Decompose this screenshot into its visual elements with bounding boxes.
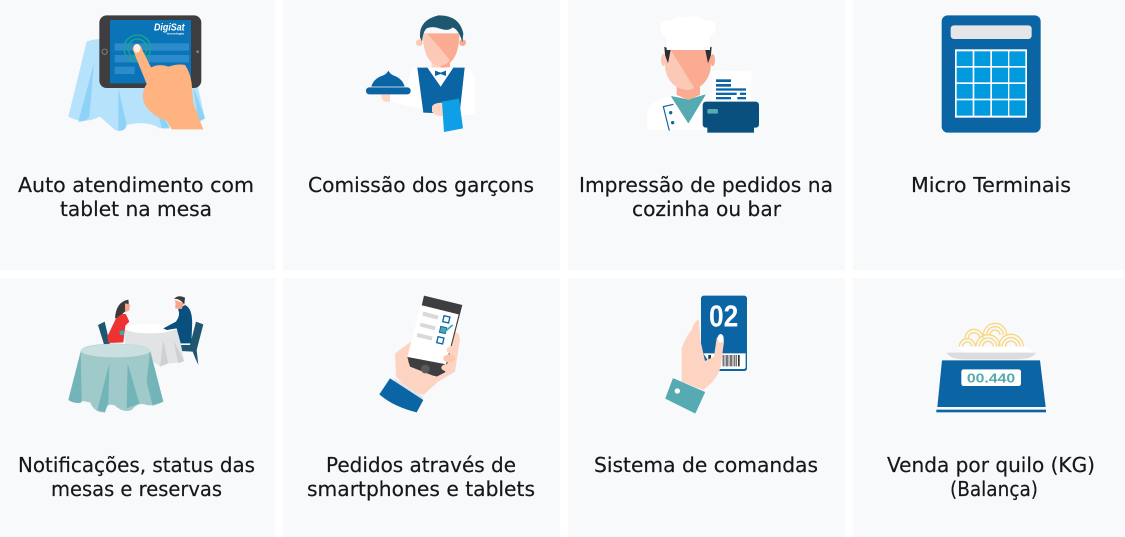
icon: tablet on table with hand: tecnologia (167, 32, 184, 36)
label: venda por quilo: Venda por quilo (KG) (887, 453, 1095, 477)
icon: micro terminal keypad (942, 15, 1041, 133)
icon: hand holding order card (666, 296, 747, 413)
icon: chef with printer (647, 16, 759, 133)
label: balança: (Balança) (950, 477, 1038, 501)
label: comissão dos garçons: Comissão dos garçons (308, 173, 534, 197)
label: sistema de comandas: Sistema de comandas (594, 453, 818, 477)
label: smartphones e tablets: smartphones e tablets (307, 477, 535, 501)
label: notificações, status das: Notificações, status das (18, 453, 255, 477)
label: cozinha ou bar: cozinha ou bar (632, 197, 782, 221)
panel: comissão dos garçons (283, 0, 560, 270)
icon: couple at tables (68, 296, 203, 412)
icon: weighing scale with noodles (936, 323, 1046, 412)
icon: tablet on table with hand: DigiSat (154, 23, 185, 34)
panel: notificações (0, 278, 275, 537)
panel: impressão de pedidos (568, 0, 845, 270)
panel: sistema de comandas (568, 278, 845, 537)
label: pedidos através de: Pedidos através de (326, 453, 516, 477)
panel: venda por quilo (853, 278, 1125, 537)
icon: weighing scale with noodles: 00.440 (967, 371, 1015, 386)
label: auto atendimento: Auto atendimento com (18, 173, 254, 197)
label: impressão de pedidos na: Impressão de pedidos na (579, 173, 833, 197)
panel: pedidos smartphones (283, 278, 560, 537)
label: mesas e reservas: mesas e reservas (51, 477, 222, 501)
icon: waiter with cloche (366, 15, 475, 132)
icon: hand holding smartphone (379, 296, 462, 412)
label: tablet na mesa: tablet na mesa (60, 197, 212, 221)
label: micro terminais: Micro Terminais (911, 173, 1071, 197)
icon: tablet on table with hand (68, 15, 205, 131)
panel: auto atendimento com tablet na mesa (0, 0, 275, 270)
icon: hand holding order card: 02 (709, 299, 738, 333)
panel: micro terminais (853, 0, 1125, 270)
